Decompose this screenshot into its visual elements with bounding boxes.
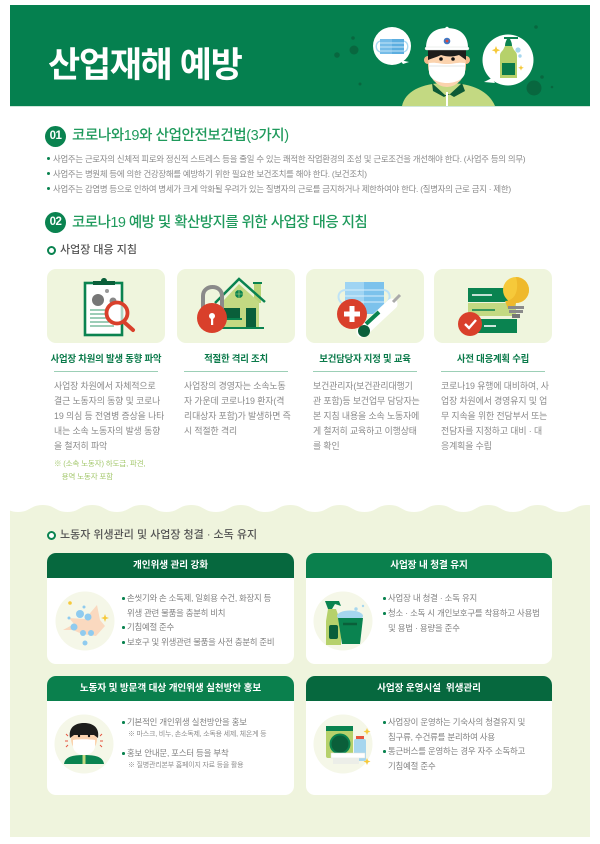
icon: washing machine and towels	[314, 714, 372, 774]
column 4 text: 전담자를 지정하고 대비 · 대	[441, 426, 542, 436]
column 1 text: 사업장 차원에서 자체적으로	[54, 381, 156, 391]
panel heading: 노동자 및 방문객 대상 개인위생 실천방안 홍보	[80, 683, 261, 694]
icon: house with padlock	[197, 277, 266, 333]
panel text: 기침예절 준수	[388, 761, 436, 771]
panel text: ※ 마스크, 비누, 손소독제, 소독용 세제, 체온계 등	[128, 731, 266, 738]
section 02 number: 02	[50, 216, 61, 228]
panel: card 3 illustration	[306, 269, 424, 343]
column 2 heading: 적절한 격리 조치	[204, 353, 268, 364]
section 01 number: 01	[50, 130, 61, 142]
column 3 text: 를 확인	[313, 441, 340, 451]
header bottom strip	[10, 106, 590, 107]
section 01 bullet list	[47, 154, 525, 194]
panel heading: 사업장 운영시설 위생관리	[377, 683, 481, 694]
panel text: 통근버스를 운영하는 경우 자주 소독하고	[388, 746, 525, 756]
panel text: ※ 질병관리본부 홈페이지 자료 등을 활용	[128, 762, 243, 769]
panel heading: 사업장 내 청결 유지	[390, 560, 468, 571]
panel text	[122, 593, 274, 647]
panel: card 2 illustration	[177, 269, 295, 343]
panel heading	[306, 553, 552, 578]
column 3 heading: 보건담당자 지정 및 교육	[319, 353, 411, 364]
icon: plan sheets, light bulb and check	[458, 277, 529, 336]
panel heading	[47, 553, 294, 578]
column 2 text: 자 가운데 코로나19 환자(격	[184, 396, 284, 406]
column 3 text: 보건관리자(보건관리대행기	[313, 381, 413, 391]
column 4 text: 코로나19 유행에 대비하여, 사	[441, 381, 549, 391]
section 01 bullet list: 사업주는 감염병 등으로 인하여 병세가 크게 악화될 우려가 있는 질병자의 근로를 금지하거나 제한하여야 한다. (질병자의 근로 금지 · 제한)	[53, 184, 511, 194]
column 1 text	[54, 381, 164, 451]
column 1 text: 19 의심 등 전염병 증상을 나타	[54, 411, 164, 421]
panel text: 손씻기와 손 소독제, 일회용 수건, 화장지 등	[127, 593, 271, 603]
panel: personal hygiene	[47, 553, 294, 664]
subheading: workplace response: 사업장 대응 지침	[60, 244, 137, 256]
panel heading	[306, 676, 552, 701]
column 1 note: ※ (소속 노동자) 하도급, 파견,	[54, 459, 145, 468]
header banner	[10, 5, 590, 107]
column 2 text	[184, 381, 291, 436]
section 01 number	[45, 126, 66, 147]
panel text	[122, 717, 266, 769]
column 2 text: 사업장의 경영자는 소속노동	[184, 381, 286, 391]
icon: mask, thermometer and medical cross	[337, 282, 401, 338]
column 3 text: 본 지침 내용을 소속 노동자에	[313, 411, 419, 421]
icon: clipboard with magnifier	[84, 278, 136, 336]
section 01 bullet list: 사업주는 근로자의 신체적 피로와 정신적 스트레스 등을 줄일 수 있는 쾌적한 작업환경의 조성 및 근로조건을 개선해야 한다. (사업주 등의 의무)	[53, 154, 525, 164]
section 01 heading: 코로나와19와 산업안전보건법(3가지)	[72, 128, 289, 144]
panel text: 기본적인 개인위생 실천방안을 홍보	[127, 717, 247, 727]
column 4 text: 무 지속을 위한 전담부서 또는	[441, 411, 547, 421]
header illustration: worker, mask and sanitizer	[334, 25, 554, 106]
panel text: 사업장이 운영하는 기숙사의 청결유지 및	[388, 717, 525, 727]
subheading: worker hygiene: 노동자 위생관리 및 사업장 청결 · 소독 유지	[60, 529, 257, 541]
column 1 text: 결근 노동자의 동향 및 코로나	[54, 396, 160, 406]
panel heading	[47, 676, 294, 701]
section 02 number	[45, 212, 66, 233]
icon: spray and bucket	[314, 592, 372, 650]
panel: card 1 illustration	[47, 269, 165, 343]
panel text: 기침예절 준수	[127, 622, 174, 632]
column 4 text: 응계획을 수립	[441, 441, 492, 451]
panel: facility hygiene	[306, 676, 552, 795]
panel text	[383, 717, 525, 771]
column 1 heading: 사업장 차원의 발생 동향 파악	[51, 353, 161, 364]
panel: workplace cleanliness	[306, 553, 552, 664]
column 4 text	[441, 381, 549, 451]
column 4 text: 업장 차원에서 경영유지 및 업	[441, 396, 547, 406]
panel text: 침구류, 수건류를 분리하여 사용	[388, 732, 495, 742]
panel: card 4 illustration	[434, 269, 552, 343]
icon: masked person	[54, 714, 114, 774]
panel text: 사업장 내 청결 · 소독 유지	[388, 593, 477, 603]
subheading marker	[47, 531, 56, 540]
column 1 note: 용역 노동자 포함	[62, 472, 113, 481]
panel text: 홍보 안내문, 포스터 등을 부착	[127, 748, 229, 758]
icon: washing hands	[56, 592, 114, 650]
column 1 note	[54, 459, 145, 481]
panel text: 위생 관련 물품을 충분히 비치	[127, 608, 225, 618]
column 3 text: 관 포함)등 보건업무 담당자는	[313, 396, 420, 406]
column 3 text: 게 철저히 교육하고 이행상태	[313, 426, 417, 436]
panel heading: 개인위생 관리 강화	[133, 560, 208, 571]
column 2 text: 시 적절한 격리	[184, 426, 237, 436]
panel text: 보호구 및 위생관련 물품을 사전 충분히 준비	[127, 637, 274, 647]
title: 산업재해 예방	[48, 46, 241, 85]
column 1 text: 을 철저히 파악	[54, 441, 107, 451]
section 02 heading: 코로나19 예방 및 확산방지를 위한 사업장 대응 지침	[72, 215, 367, 231]
section 01 bullet list: 사업주는 병원체 등에 의한 건강장해를 예방하기 위한 필요한 보건조치를 해야 한다. (보건조치)	[53, 169, 367, 179]
column 2 text: 리대상자 포함)가 발생하면 즉	[184, 411, 291, 421]
column 3 text	[313, 381, 420, 451]
panel text: 및 용법 · 용량을 준수	[388, 623, 460, 633]
panel text: 청소 · 소독 시 개인보호구를 착용하고 사용법	[388, 608, 540, 618]
panel text	[383, 593, 540, 633]
panel: worker and visitor hygiene promotion	[47, 676, 294, 795]
lower section background with wavy top	[10, 505, 590, 837]
subheading marker	[47, 246, 56, 255]
column 1 text: 내는 소속 노동자의 발생 동향	[54, 426, 160, 436]
column 4 heading: 사전 대응계획 수립	[457, 353, 529, 364]
